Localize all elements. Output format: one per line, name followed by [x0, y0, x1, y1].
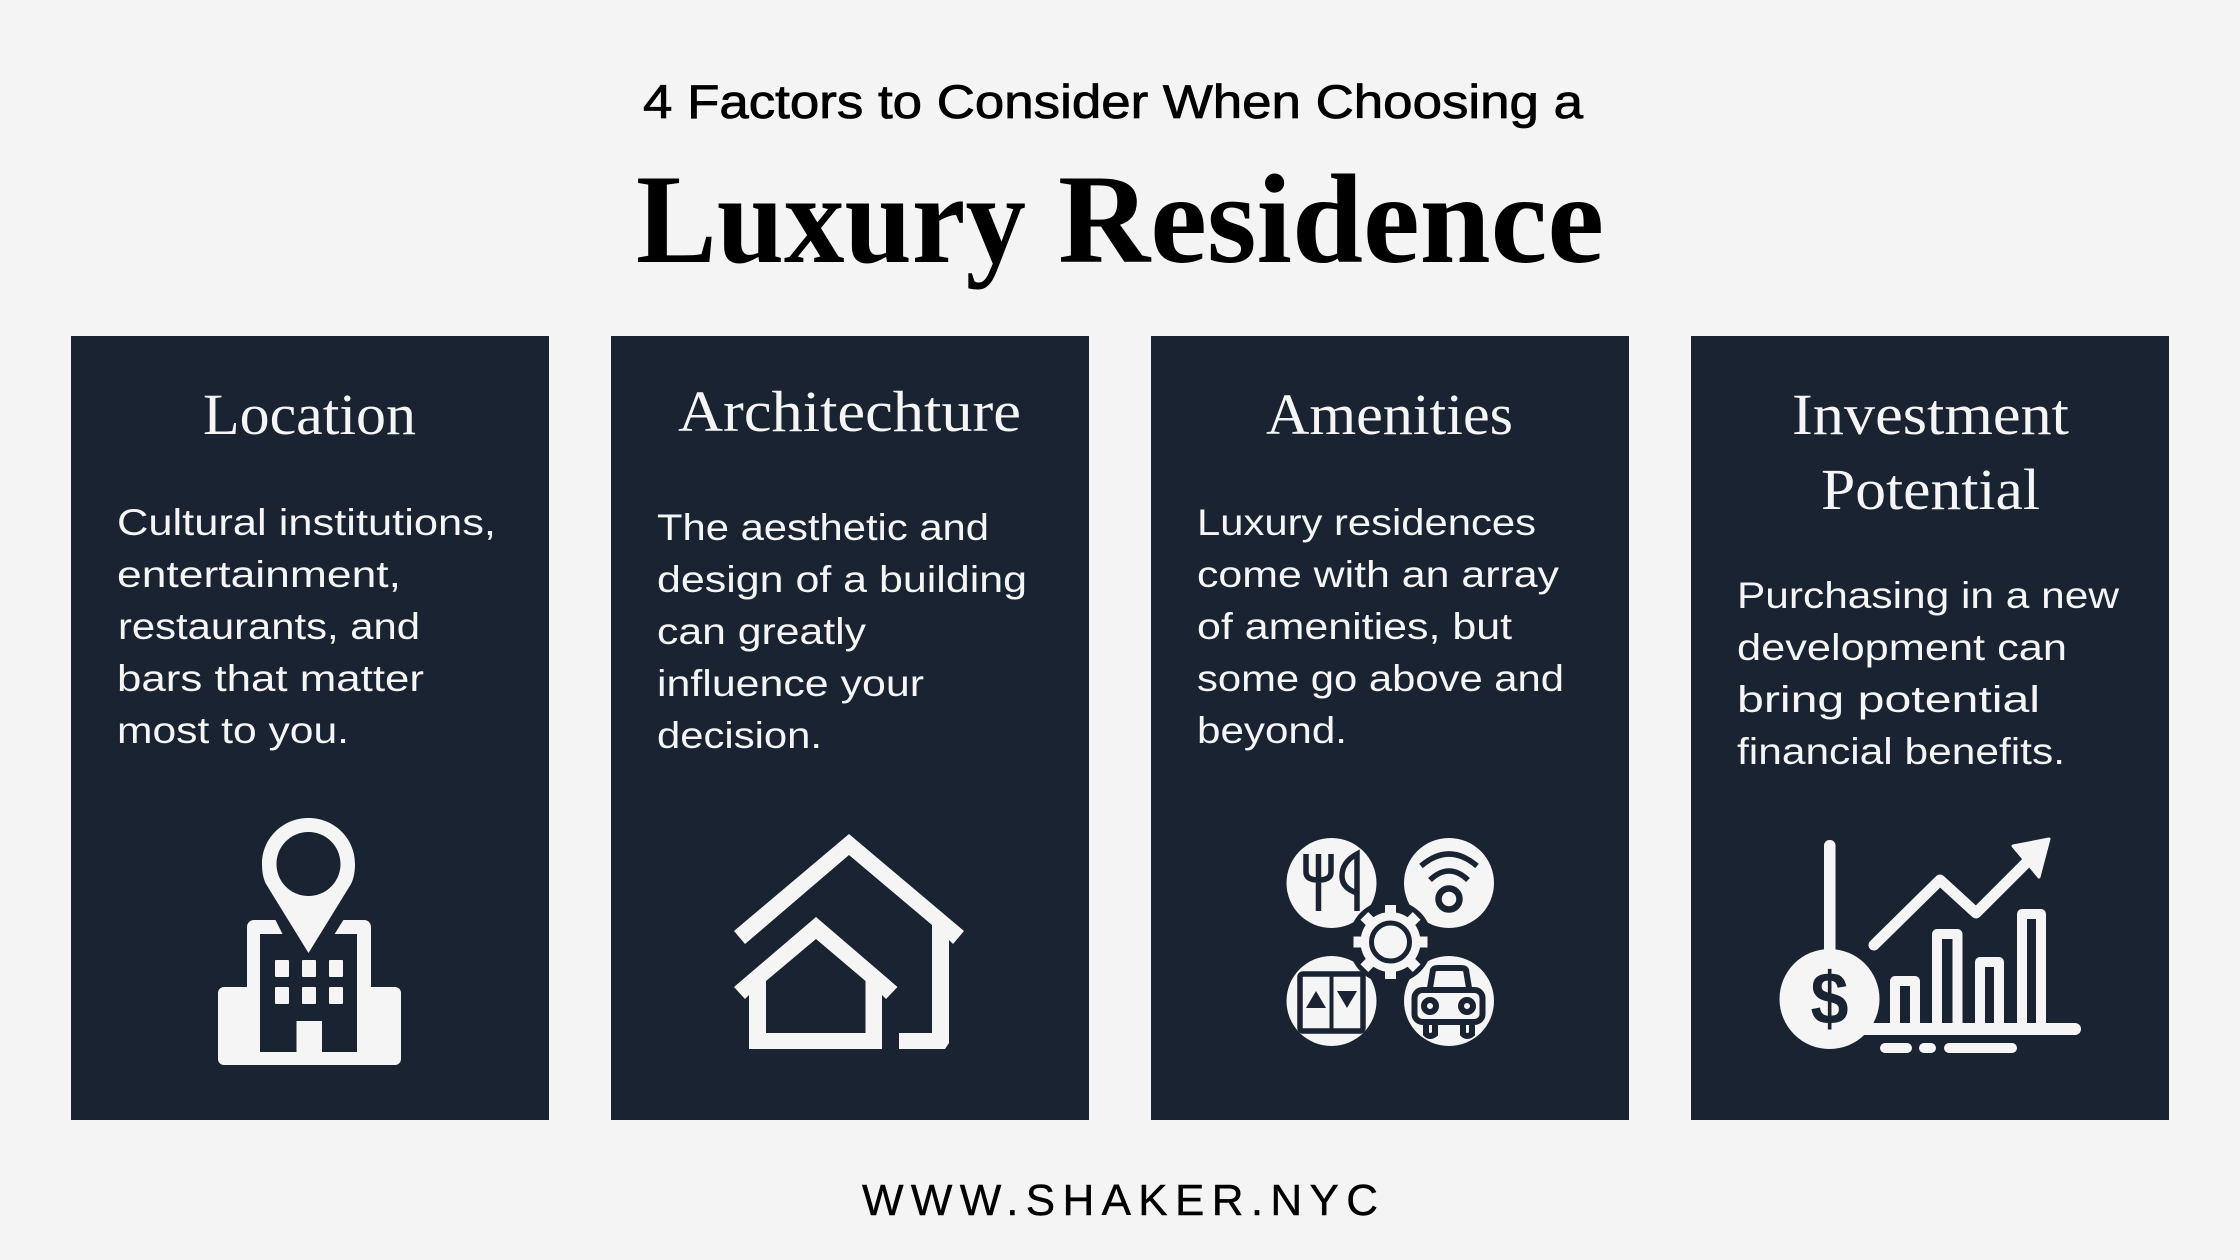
text block: location: entertainment, [117, 554, 401, 595]
heading: architecture: Architechture [678, 379, 1021, 444]
text block: location [117, 502, 496, 751]
coin: $ [1810, 957, 1848, 1040]
text block: amenities: beyond. [1197, 710, 1347, 751]
icon: car [1404, 956, 1494, 1046]
text block: amenities [1197, 502, 1564, 751]
panel: architecture [611, 336, 1089, 1120]
heading: amenities: Amenities [1266, 382, 1513, 447]
text block: architecture: The aesthetic and [657, 507, 989, 548]
footer url: WWW.SHAKER.NYC [862, 1176, 1378, 1225]
text block: investment potential: development can [1737, 627, 2067, 668]
text block: architecture [657, 507, 1027, 756]
title [636, 150, 1604, 290]
icon: gear [1348, 900, 1432, 984]
text block: amenities: Luxury residences [1197, 502, 1536, 543]
text block: amenities: some go above and [1197, 658, 1564, 699]
heading: investment potential: Potential [1821, 457, 2040, 522]
text block: architecture: design of a building [657, 559, 1027, 600]
heading: investment potential [1792, 382, 2069, 522]
bars [1895, 914, 2041, 1025]
text block: location: most to you. [117, 710, 349, 751]
text block: location: restaurants, and [118, 606, 420, 647]
icon: investment chart [1780, 839, 2081, 1053]
panel: amenities [1151, 336, 1629, 1120]
icon: houses [734, 834, 964, 1049]
icon: map pin over building [218, 818, 401, 1065]
subtitle: 4 Factors to Consider When Choosing a [643, 75, 1584, 128]
text block: amenities: of amenities, but [1197, 606, 1513, 647]
text block: architecture: influence your [657, 663, 924, 704]
coin [1780, 949, 1880, 1049]
heading: location: Location [203, 382, 416, 447]
title: Luxury [636, 150, 1026, 290]
text block: investment potential: bring potential [1737, 679, 2040, 720]
text block: location: Cultural institutions, [117, 502, 496, 543]
text block: investment potential: financial benefits. [1737, 731, 2065, 772]
icon: wifi [1404, 838, 1494, 928]
icon: elevator [1286, 956, 1376, 1046]
text block: architecture: decision. [657, 715, 822, 756]
icon: amenities cluster [1286, 838, 1494, 1046]
text block: investment potential: Purchasing in a new [1737, 575, 2119, 616]
icon: fork and knife [1286, 838, 1376, 928]
text block: investment potential [1737, 575, 2119, 772]
text block: amenities: come with an array [1197, 554, 1560, 595]
panel: location [71, 336, 549, 1120]
title: Residence [1058, 150, 1604, 290]
text block: location: bars that matter [117, 658, 424, 699]
text block: architecture: can greatly [657, 611, 867, 652]
arrow [1874, 839, 2049, 945]
heading: investment potential: Investment [1792, 382, 2069, 447]
panel: investment potential [1691, 336, 2169, 1120]
